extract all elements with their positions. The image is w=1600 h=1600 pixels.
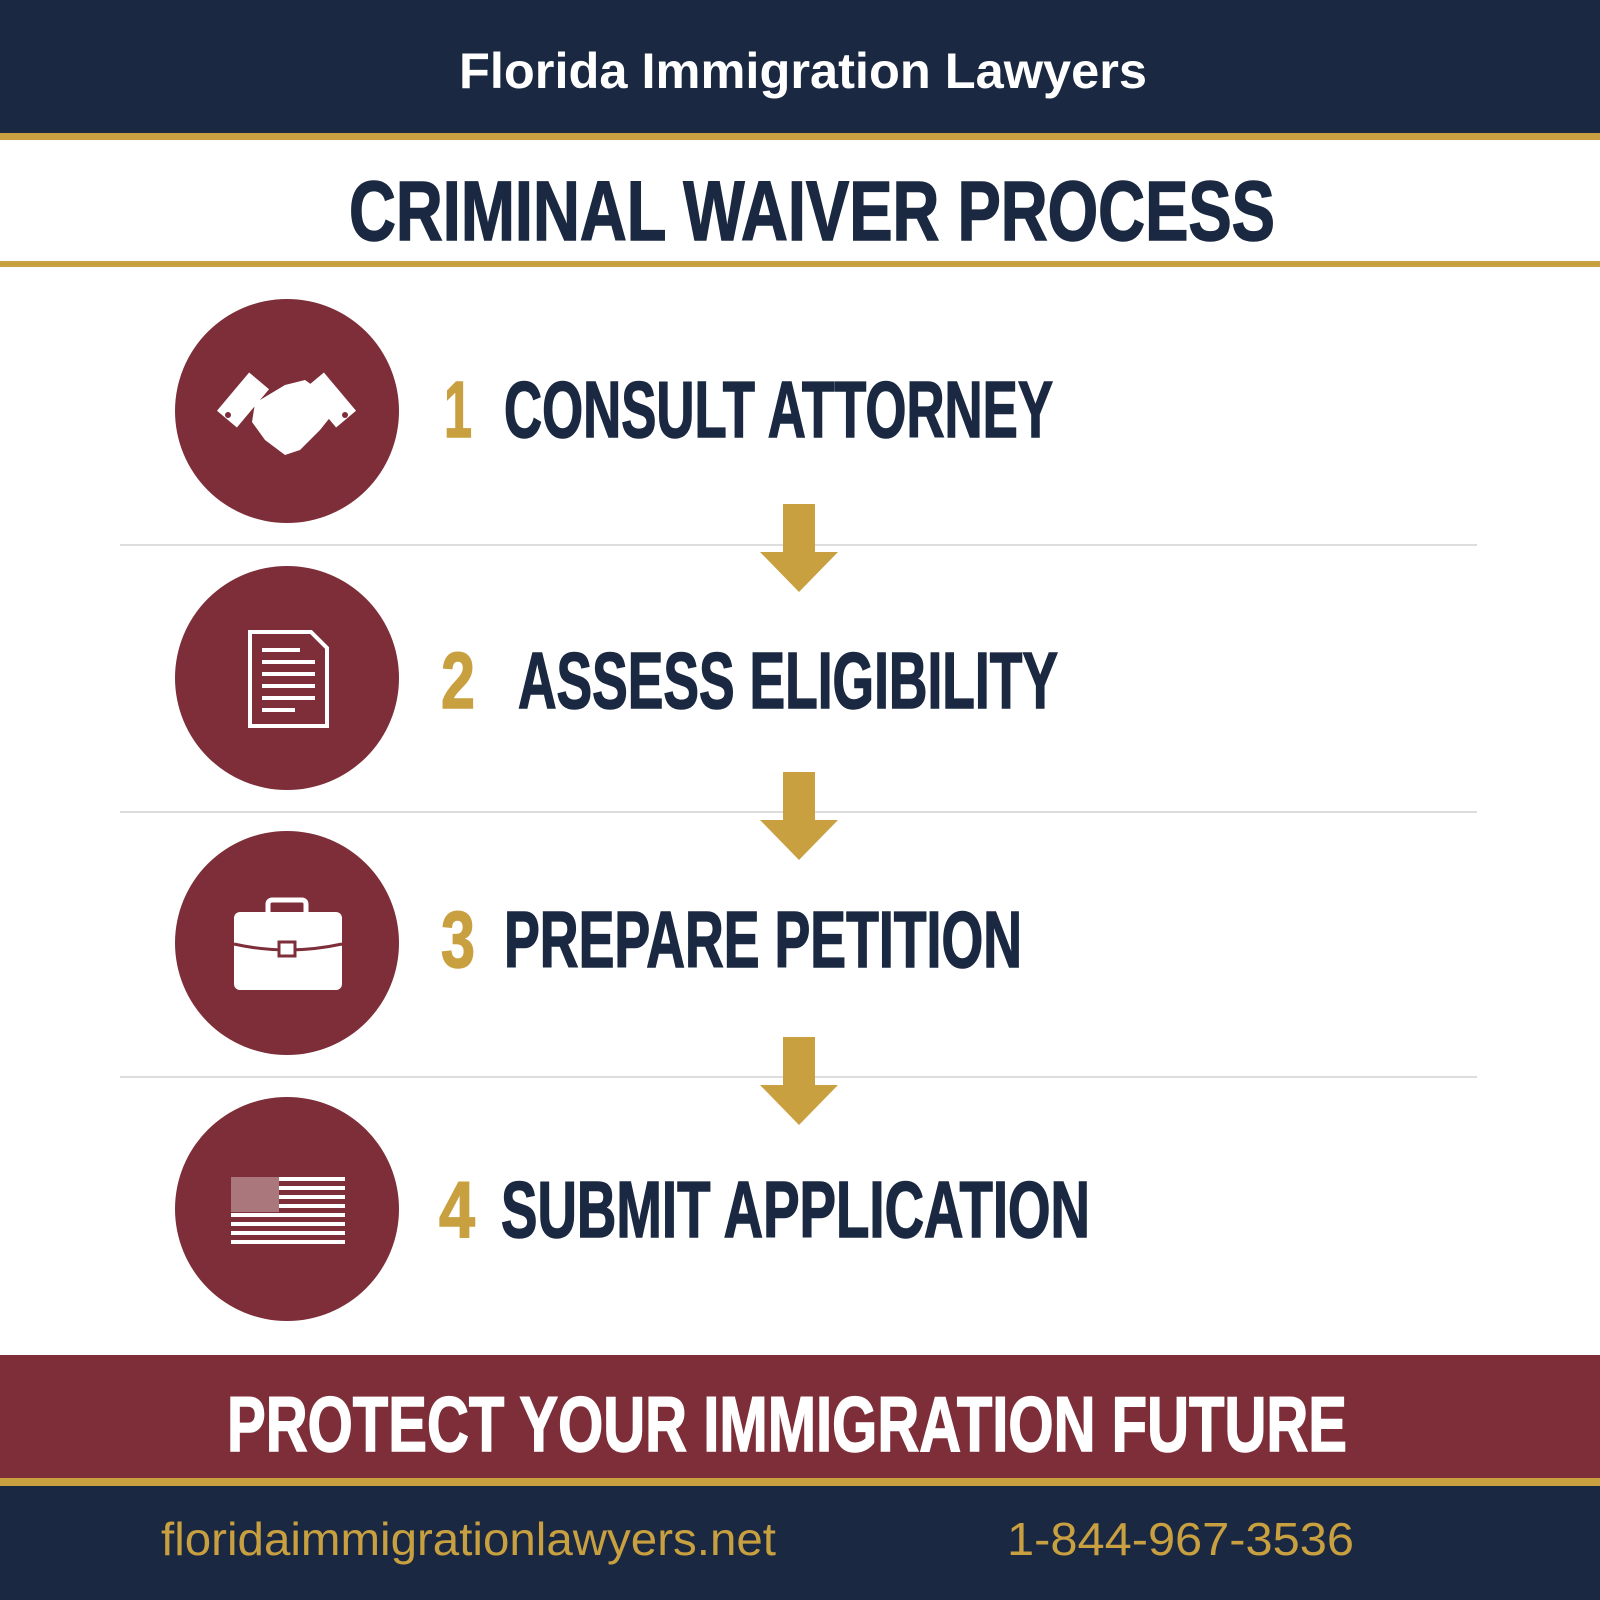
banner: protect your immigration future	[0, 1355, 1600, 1479]
header: firm name: Florida Immigration Lawyers	[459, 43, 1147, 99]
title	[0, 164, 1600, 267]
step 2: assess eligibility	[175, 566, 1058, 790]
footer: phone: 1-844-967-3536	[1007, 1513, 1354, 1565]
step 3: prepare petition	[175, 831, 1022, 1055]
icon: flag	[175, 1097, 399, 1321]
step number 1: 1	[444, 365, 472, 454]
step number 3: 3	[441, 895, 475, 984]
step number 4: 4	[439, 1165, 475, 1254]
step number 2: 2	[441, 636, 475, 725]
step label 2: ASSESS ELIGIBILITY	[518, 636, 1058, 725]
footer: website: floridaimmigrationlawyers.net	[161, 1513, 776, 1565]
arrow 3	[760, 1037, 838, 1125]
header bar	[0, 0, 1600, 140]
icon: briefcase	[175, 831, 399, 1055]
step label 4: SUBMIT APPLICATION	[501, 1165, 1090, 1254]
arrow 2	[760, 772, 838, 860]
step 1: consult attorney	[175, 299, 1053, 523]
icon: handshake	[175, 299, 399, 523]
arrow 1	[760, 504, 838, 592]
step label 1: CONSULT ATTORNEY	[504, 365, 1053, 454]
icon: document	[175, 566, 399, 790]
step 4: submit application	[175, 1097, 1090, 1321]
step label 3: PREPARE PETITION	[504, 895, 1022, 984]
footer	[0, 1478, 1600, 1600]
title: CRIMINAL WAIVER PROCESS	[349, 164, 1275, 258]
